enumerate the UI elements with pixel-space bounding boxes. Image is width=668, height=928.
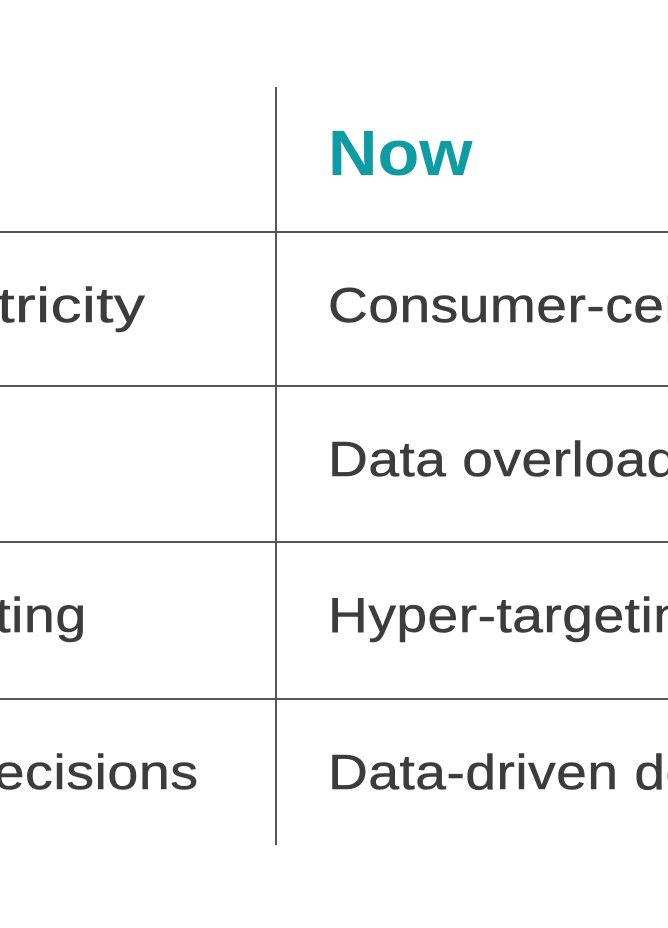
vertical divider <box>275 87 277 845</box>
left column text: row 4: ecisions <box>0 746 199 800</box>
left column text: row 1: tricity <box>0 279 145 333</box>
heading: Now: Now <box>328 117 473 189</box>
right column text: row 2: Data overload <box>328 433 668 487</box>
